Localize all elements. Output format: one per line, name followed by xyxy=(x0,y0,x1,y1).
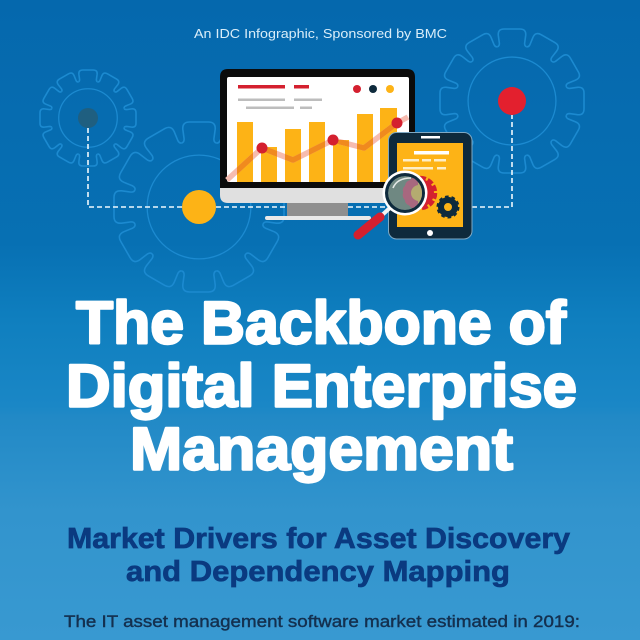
tablet illustration xyxy=(388,132,472,239)
subtitle: Market Drivers for Asset Discovery xyxy=(67,523,570,555)
screen header lines xyxy=(238,85,322,109)
icon: red gear xyxy=(404,178,436,208)
title: Management xyxy=(130,416,513,482)
gear: small left xyxy=(40,70,136,166)
monitor stand xyxy=(287,203,348,216)
tablet home button xyxy=(427,230,433,236)
trend line xyxy=(227,117,408,180)
magnifier rim xyxy=(382,170,428,216)
tablet screen xyxy=(397,143,463,227)
trend points xyxy=(256,118,402,154)
icon: dark gear xyxy=(438,197,458,217)
market statement: The IT asset management software market estimated in 2019: xyxy=(64,613,580,631)
magnifier lens xyxy=(388,176,422,210)
screen legend dots xyxy=(353,85,394,93)
gear: large centre xyxy=(114,122,284,292)
tablet body xyxy=(388,132,472,239)
title: Digital Enterprise xyxy=(66,352,577,420)
gear: right xyxy=(440,29,584,173)
monitor illustration xyxy=(220,69,415,220)
node: red dot xyxy=(498,87,526,115)
dashed connectors xyxy=(88,115,512,207)
node: yellow dot xyxy=(182,190,216,224)
tablet speaker xyxy=(421,136,440,138)
subtitle: and Dependency Mapping xyxy=(126,556,510,588)
node: dark dot xyxy=(78,108,98,128)
magnifying glass xyxy=(358,170,435,235)
magnifier handle xyxy=(358,217,380,235)
title xyxy=(66,290,577,482)
tablet text lines xyxy=(403,151,449,170)
monitor base xyxy=(265,216,371,220)
monitor chin xyxy=(220,185,415,203)
subtitle xyxy=(67,523,570,588)
magnifier neck xyxy=(379,205,393,218)
bar chart xyxy=(237,108,397,182)
monitor screen xyxy=(227,77,409,182)
monitor bezel xyxy=(220,69,415,188)
title: The Backbone of xyxy=(76,290,567,356)
sponsor line: An IDC Infographic, Sponsored by BMC xyxy=(194,26,447,41)
